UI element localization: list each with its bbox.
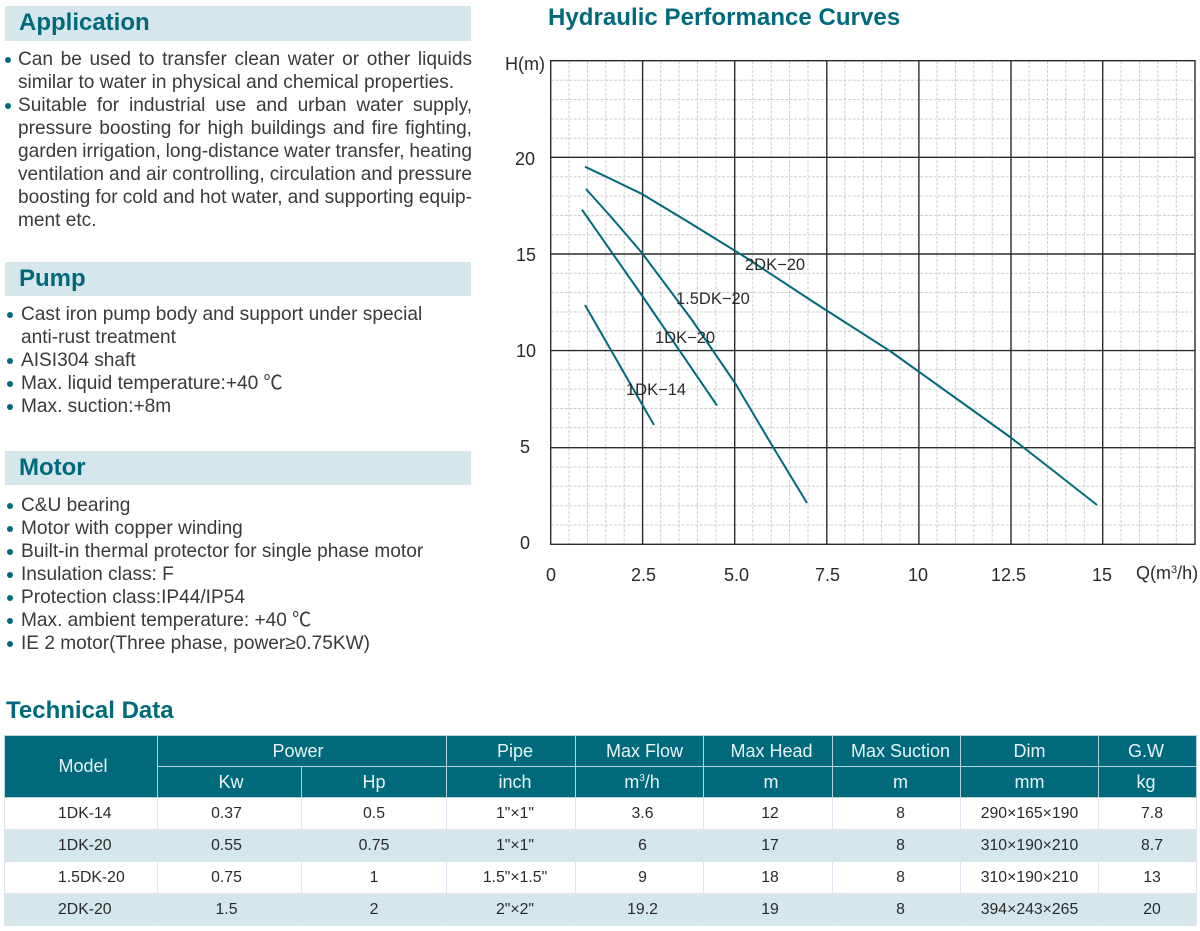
x axis labels: 10 <box>908 565 928 585</box>
table: technical data: Model <box>58 756 108 776</box>
table: technical data: Kw <box>218 772 244 792</box>
table: technical data: Pipe <box>497 740 533 760</box>
table: technical data: 19 <box>761 900 779 918</box>
table: technical data: 3.6 <box>632 804 653 822</box>
y axis labels: H(m) <box>505 54 545 74</box>
table: technical data: 1DK-14 <box>58 804 112 822</box>
heading: Hydraulic Performance Curves: Hydraulic Performance Curves <box>548 4 900 31</box>
table: technical data: 0.5 <box>363 804 385 822</box>
table: technical data: 1 <box>370 868 378 886</box>
text block: application list: pressure boosting for high buildings and fire fighting, <box>18 118 472 139</box>
table: technical data: Max Suction <box>851 740 950 760</box>
table: technical data: Hp <box>362 772 386 792</box>
x axis labels: Q(m <box>1136 563 1171 583</box>
curve labels: 1DK−20 <box>655 329 715 347</box>
table: technical data: 9 <box>638 868 647 886</box>
table: technical data: Max Head <box>730 740 813 760</box>
table: technical data: inch <box>498 772 532 792</box>
table: technical data: 19.2 <box>627 900 658 918</box>
table: technical data: 13 <box>1143 868 1161 886</box>
y axis labels: 15 <box>516 245 536 265</box>
table: technical data: 0.37 <box>211 804 242 822</box>
x axis labels: 5.0 <box>724 565 749 585</box>
table: technical data: 1DK-20 <box>58 836 112 854</box>
table: technical data: 20 <box>1143 900 1161 918</box>
table: technical data: 8 <box>896 900 905 918</box>
table: technical data <box>4 735 1197 926</box>
table: technical data: 310×190×210 <box>981 868 1078 886</box>
curve labels: 1DK−14 <box>626 381 686 399</box>
text block: motor list: Motor with copper winding <box>21 518 243 539</box>
text block: motor list: Built-in thermal protector for single phase motor <box>21 541 423 562</box>
table: technical data: 1"×1" <box>496 836 534 854</box>
x axis labels: 7.5 <box>815 565 840 585</box>
curve: 1.5DK-20 <box>586 189 807 503</box>
y axis labels <box>505 54 545 553</box>
text block: application list: ment etc. <box>18 210 97 231</box>
heading: Application <box>5 6 471 41</box>
text block: application list: boosting for cold and hot water, and supporting equip- <box>18 187 472 208</box>
table: technical data: G.W <box>1128 740 1164 760</box>
curve: 1DK-20 <box>582 210 717 406</box>
table: technical data: 8 <box>896 868 905 886</box>
text block: motor list: C&U bearing <box>21 495 130 516</box>
heading: Motor: Motor <box>19 454 86 481</box>
heading: Motor <box>5 451 471 485</box>
table: technical data: 17 <box>761 836 779 854</box>
curve labels: 2DK−20 <box>745 256 805 274</box>
table: technical data: kg <box>1136 772 1156 792</box>
text block: motor list: IE 2 motor(Three phase, power≥0.75KW) <box>21 633 370 654</box>
text block: motor list <box>7 495 423 654</box>
text block: application list: similar to water in physical and chemical properties. <box>18 72 454 93</box>
chart: hydraulic performance curves <box>505 54 1198 585</box>
curve: 2DK-20 <box>585 167 1097 505</box>
curve labels: 1.5DK−20 <box>676 290 750 308</box>
text block: pump list: anti-rust treatment <box>21 327 176 348</box>
table: technical data: 0.55 <box>211 836 242 854</box>
table: technical data: 1"×1" <box>496 804 534 822</box>
y axis labels: 5 <box>520 437 530 457</box>
heading: Technical Data: Technical Data <box>6 697 174 724</box>
table: technical data: 7.8 <box>1141 804 1163 822</box>
y axis labels: 10 <box>516 341 536 361</box>
table: technical data: Max Flow <box>606 740 683 760</box>
text block: pump list: Max. suction:+8m <box>21 396 171 417</box>
table: technical data: m <box>893 772 908 792</box>
table: technical data: Dim <box>1014 740 1046 760</box>
table: technical data: 18 <box>761 868 779 886</box>
x axis labels: 2.5 <box>631 565 656 585</box>
table: technical data: 0.75 <box>359 836 389 854</box>
y axis labels: 0 <box>520 533 530 553</box>
table: technical data: 2"×2" <box>496 900 534 918</box>
table: technical data: 310×190×210 <box>981 836 1078 854</box>
heading: Pump <box>5 262 471 296</box>
x axis labels: 3 <box>1171 564 1177 576</box>
text block: pump list: Max. liquid temperature:+40 ℃ <box>21 373 283 394</box>
table: technical data: 2 <box>370 900 378 918</box>
y axis labels: 20 <box>515 149 535 169</box>
text block: application list: Can be used to transfer clean water or other liquids <box>18 49 472 70</box>
text block: motor list: Protection class:IP44/IP54 <box>21 587 245 608</box>
table: technical data: 2DK-20 <box>58 900 112 918</box>
text block: application list: garden irrigation, long-distance water transfer, heating <box>18 141 472 162</box>
x axis labels: 0 <box>546 565 556 585</box>
table: technical data: 290×165×190 <box>981 804 1078 822</box>
table: technical data: 8 <box>896 836 905 854</box>
text block: application list: ventilation and air controlling, circulation and pressure <box>18 164 472 185</box>
heading: Pump: Pump <box>19 265 86 292</box>
table: technical data: mm <box>1014 772 1044 792</box>
text block: pump list <box>7 304 422 417</box>
table: technical data: 0.75 <box>211 868 242 886</box>
table: technical data: 1.5DK-20 <box>58 868 125 886</box>
x axis labels <box>546 563 1198 585</box>
x axis labels: 15 <box>1092 565 1112 585</box>
table: technical data: 1.5 <box>216 900 237 918</box>
text block: application list: Suitable for industrial use and urban water supply, <box>18 95 472 116</box>
table: technical data: 394×243×265 <box>981 900 1078 918</box>
text block: pump list: Cast iron pump body and support under special <box>21 304 422 325</box>
table: technical data: 12 <box>761 804 779 822</box>
text block: pump list: AISI304 shaft <box>21 350 136 371</box>
text block: motor list: Insulation class: F <box>21 564 174 585</box>
table: technical data: 8.7 <box>1141 836 1163 854</box>
text block: application list <box>5 49 472 231</box>
table: technical data: 1.5"×1.5" <box>483 868 547 886</box>
curve: 1DK-14 <box>585 305 654 425</box>
table: technical data: m <box>764 772 778 792</box>
x axis labels: /h) <box>1177 563 1198 583</box>
heading: Application: Application <box>19 9 150 36</box>
x axis labels: 12.5 <box>991 565 1026 585</box>
curve labels <box>626 256 805 399</box>
table: technical data: 6 <box>638 836 647 854</box>
table: technical data: m3/h <box>624 772 660 792</box>
text block: motor list: Max. ambient temperature: +40 ℃ <box>21 610 311 631</box>
table: technical data: 8 <box>896 804 905 822</box>
table: technical data: Power <box>272 740 324 760</box>
